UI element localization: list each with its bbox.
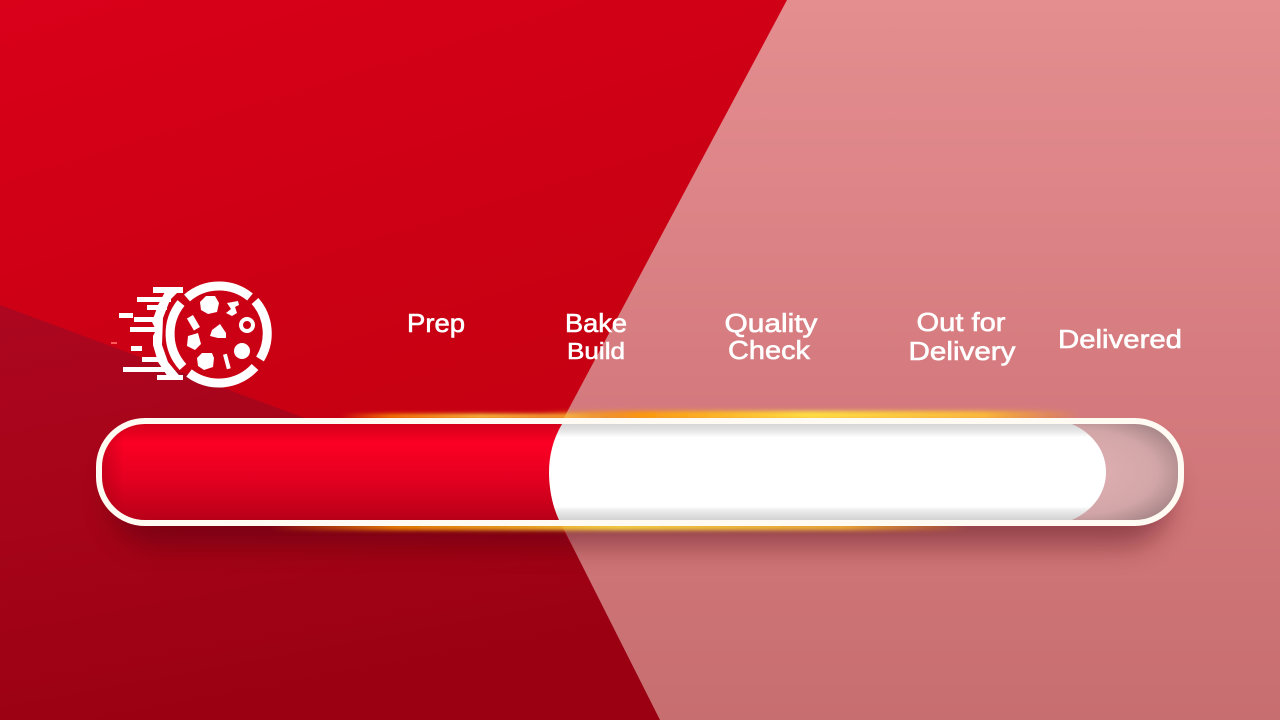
label: Out for Delivery xyxy=(908,307,1016,366)
pizza toppings xyxy=(187,296,253,370)
icon: speeding pizza xyxy=(111,286,267,383)
empty track xyxy=(1072,424,1178,520)
red filled segment xyxy=(102,424,582,520)
step labels xyxy=(407,307,1182,366)
label: Quality Check: Check xyxy=(728,335,811,365)
bar outline xyxy=(99,421,1181,523)
background: dark red lower-left wedge xyxy=(0,305,670,720)
label: Out for Delivery: Delivery xyxy=(908,336,1016,366)
label: Quality Check xyxy=(724,308,818,365)
white filled segment xyxy=(549,424,1106,520)
label: Bake xyxy=(565,308,627,364)
label: Bake: Bake xyxy=(565,308,627,338)
bar drop shadow xyxy=(110,445,1170,545)
label: Prep: Prep xyxy=(407,308,465,338)
speed lines xyxy=(111,287,183,380)
bar top and bottom glow xyxy=(270,411,1080,530)
progress bar xyxy=(99,421,1181,523)
label: Bake: Build xyxy=(567,338,625,364)
pizza rim xyxy=(170,286,267,383)
background: pink right panel xyxy=(535,0,1280,720)
label: Delivered: Delivered xyxy=(1058,324,1182,354)
label: Quality Check: Quality xyxy=(724,308,818,338)
label: Out for Delivery: Out for xyxy=(916,307,1006,337)
